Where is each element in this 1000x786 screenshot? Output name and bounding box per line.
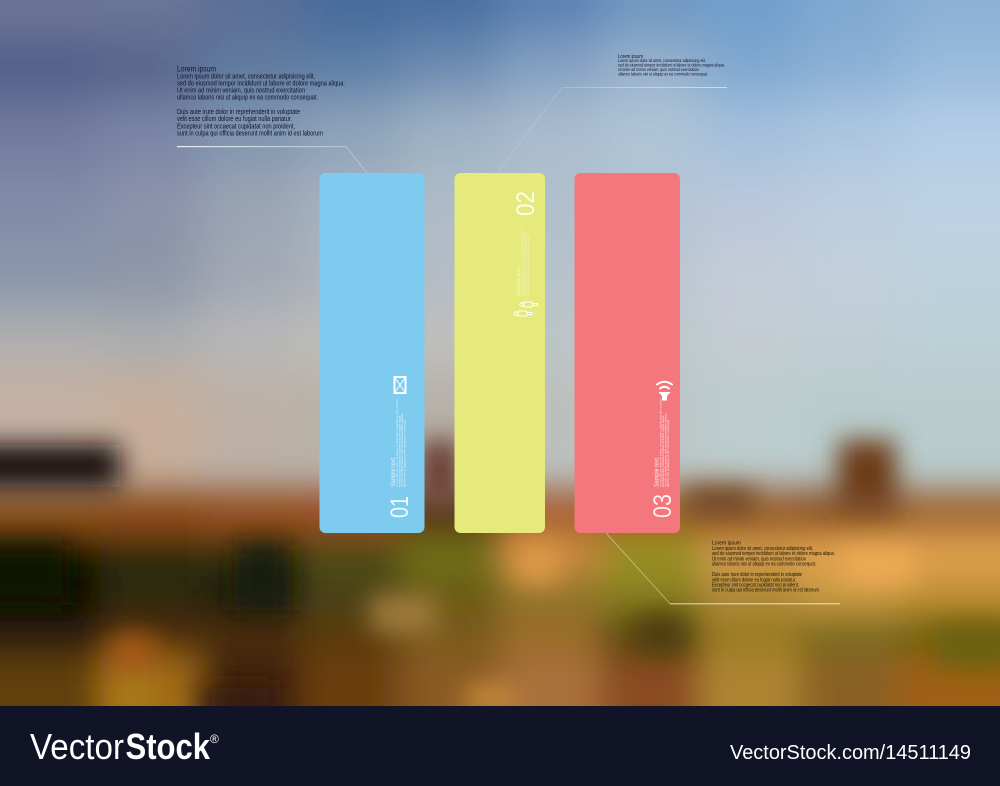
VectorStock logo: Stock bbox=[126, 726, 211, 767]
icon: speaker with sound waves bbox=[657, 382, 672, 400]
text block: top left bbox=[177, 64, 345, 137]
text block: top right: Lorem ipsum bbox=[618, 54, 643, 60]
icon: envelope bbox=[394, 377, 406, 393]
text block: bottom right: Lorem ipsum bbox=[712, 541, 741, 547]
text block: top right: Lorem ipsum dolor sit amet, consectetur adipisicing elit, bbox=[618, 58, 706, 63]
sample text 02: Ut enim ad minim veniam, quis nostrud exercitation ullamco bbox=[525, 229, 528, 296]
panel: yellow column 02 bbox=[454, 173, 545, 533]
sample text 03: laboris nisi ut aliquip ex ea commodo consequat. bbox=[667, 419, 670, 487]
text block: bottom right: Duis aute irure dolor in reprehenderit in voluptate bbox=[712, 572, 802, 578]
text block: top left: Excepteur sint occaecat cupidatat non proident, bbox=[177, 123, 295, 130]
sample text 02 bbox=[516, 221, 530, 296]
sample text 02: eiusmod tempor incididunt ut labore et dolore magna aliqua. bbox=[523, 232, 526, 296]
text block: bottom right: Ut enim ad minim veniam, quis nostrud exercitation bbox=[712, 556, 806, 562]
text block: top right: sed do eiusmod tempor incididunt ut labore et dolore magna aliqua. bbox=[618, 63, 725, 68]
text block: top right bbox=[618, 54, 725, 77]
sample text 01 bbox=[391, 398, 406, 487]
text block: bottom right: velit esse cillum dolore eu fugiat nulla pariatur. bbox=[712, 577, 796, 583]
VectorStock logo: ® bbox=[210, 732, 219, 746]
leader line: top left bbox=[177, 146, 367, 173]
footer band bbox=[0, 706, 1000, 786]
text block: bottom right: Lorem ipsum dolor sit amet, consectetur adipisicing elit, bbox=[712, 546, 813, 552]
sample text 01: Sample text bbox=[391, 458, 397, 487]
sample text 01: Ut enim ad minim veniam, quis nostrud exercitation ullamco bbox=[401, 412, 404, 487]
text block: top left: Lorem ipsum dolor sit amet, consectetur adipisicing elit, bbox=[177, 74, 315, 80]
VectorStock logo bbox=[30, 726, 219, 767]
number 02: 02 bbox=[512, 191, 540, 216]
sample text 01: Lorem ipsum dolor sit amet, consectetur adipisicing elit, sed do bbox=[396, 398, 399, 487]
sample text 03: eiusmod tempor incididunt ut labore et dolore magna aliqua. bbox=[662, 415, 665, 487]
text block: bottom right: Excepteur sint occaecat cupidatat non proident, bbox=[712, 582, 799, 588]
leader line: bottom right bbox=[606, 533, 840, 604]
sample text 03 bbox=[654, 398, 670, 487]
text block: top right: ullamco laboris nisi ut aliquip ex ea commodo consequat. bbox=[618, 72, 708, 77]
sample text 01: eiusmod tempor incididunt ut labore et dolore magna aliqua. bbox=[398, 415, 401, 487]
sample text 01: laboris nisi ut aliquip ex ea commodo consequat. bbox=[403, 419, 406, 487]
image id: VectorStock.com/14511149 bbox=[730, 742, 971, 764]
text block: bottom right bbox=[712, 541, 835, 594]
text block: top left: ullamco laboris nisi ut aliquip ex ea commodo consequat. bbox=[177, 95, 318, 102]
number 01: 01 bbox=[386, 496, 414, 518]
text block: bottom right: sunt in culpa qui officia deserunt mollit anim id est laborum bbox=[712, 588, 819, 594]
text block: top right: Ut enim ad minim veniam, quis nostrud exercitation bbox=[618, 67, 699, 72]
text block: top left: Lorem ipsum bbox=[177, 64, 216, 74]
sample text 02: laboris nisi ut aliquip ex ea commodo consequat. bbox=[527, 236, 530, 296]
leader line: top right bbox=[497, 87, 727, 173]
panel: red column 03 bbox=[574, 173, 680, 533]
panel: blue column 01 bbox=[320, 173, 424, 533]
sample text 02: Lorem ipsum dolor sit amet, consectetur adipisicing elit, sed do bbox=[520, 221, 524, 296]
text block: top left: Ut enim ad minim veniam, quis nostrud exercitation bbox=[177, 88, 305, 95]
sample text 03: Sample text bbox=[654, 458, 660, 487]
sample text 02: Sample text bbox=[516, 267, 522, 296]
icon: two people bbox=[514, 302, 538, 316]
number 03: 03 bbox=[649, 494, 677, 518]
VectorStock logo: Vector bbox=[30, 726, 124, 767]
sample text 03: Ut enim ad minim veniam, quis nostrud exercitation ullamco bbox=[664, 412, 667, 487]
text block: top left: velit esse cillum dolore eu fugiat nulla pariatur. bbox=[177, 116, 292, 123]
text block: top left: sunt in culpa qui officia deserunt mollit anim id est laborum bbox=[177, 130, 323, 137]
text block: bottom right: ullamco laboris nisi ut aliquip ex ea commodo consequat. bbox=[712, 562, 816, 568]
sample text 03: Lorem ipsum dolor sit amet, consectetur adipisicing elit, sed do bbox=[659, 398, 662, 487]
text block: top left: sed do eiusmod tempor incididunt ut labore et dolore magna aliqua. bbox=[177, 80, 345, 88]
text block: top left: Duis aute irure dolor in reprehenderit in voluptate bbox=[177, 109, 300, 116]
text block: bottom right: sed do eiusmod tempor incididunt ut labore et dolore magna aliqua. bbox=[712, 551, 835, 557]
